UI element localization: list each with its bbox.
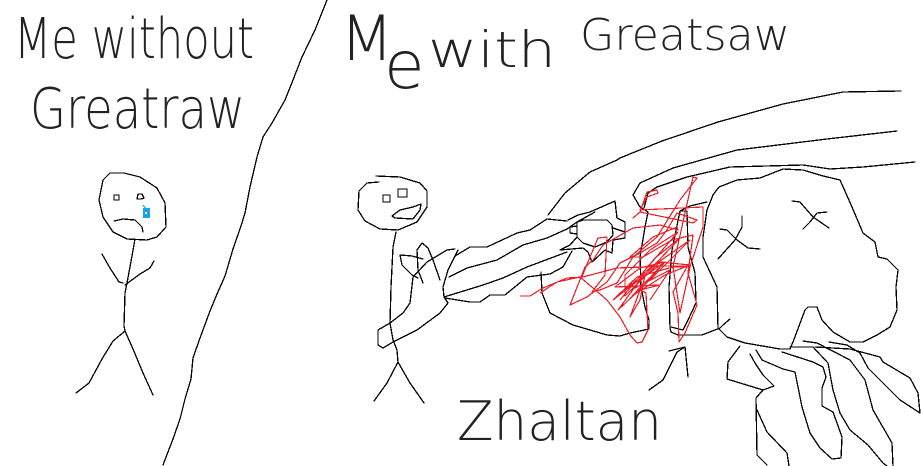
panel divider line: [163, 0, 327, 465]
second back curve and front leg: [541, 131, 897, 336]
saw bottom edge: [445, 251, 572, 302]
saw teeth: [560, 201, 625, 262]
blue tear: [143, 205, 150, 218]
face outline: [358, 176, 427, 230]
left eye X: [718, 216, 760, 259]
tentacle 5: [815, 342, 920, 413]
right eye X: [792, 201, 829, 229]
left eye: [383, 195, 390, 202]
saw rear detail: [570, 226, 577, 234]
saw second line: [449, 212, 595, 277]
tentacle 3: [790, 347, 887, 466]
saw third line: [444, 252, 567, 297]
sad stick figure: [76, 173, 166, 395]
head: [703, 169, 898, 349]
sad face outline: [99, 173, 166, 240]
right eye: [398, 189, 407, 197]
left leg: [76, 331, 125, 393]
jaw tick: [719, 319, 730, 329]
saw cross-bar: [613, 228, 625, 232]
heading: Me with Greatsaw (Me): e: [384, 27, 425, 104]
chainsaw handle: [378, 249, 458, 348]
body: [390, 232, 398, 362]
left leg: [374, 362, 398, 401]
fingers: [417, 243, 440, 283]
rear leg inner: [671, 211, 696, 330]
frown: [114, 219, 143, 232]
hand loop: [400, 255, 423, 278]
tentacle 1 lower: [756, 390, 789, 466]
right leg: [125, 331, 153, 395]
mouth: [392, 204, 421, 219]
heading: Me without Greatraw (line 2): Greatraw: [30, 77, 245, 142]
scribble tail: [520, 266, 690, 296]
left arm: [102, 254, 123, 283]
heading: Me with Greatsaw (Greatsaw): Greatsaw: [580, 10, 790, 61]
right eye: [137, 194, 144, 199]
right arm: [125, 261, 154, 285]
right leg: [398, 362, 424, 403]
happy stick figure: [358, 176, 440, 403]
chainsaw: [378, 201, 625, 348]
main scribble: [540, 177, 703, 343]
saw hub: [577, 220, 613, 247]
heading: Me with Greatsaw (with): with: [428, 21, 556, 79]
saw top edge: [455, 219, 567, 256]
rear leg outer: [669, 202, 720, 335]
tentacle 4: [803, 341, 893, 466]
upper back curve: [548, 91, 901, 215]
third back curve: [644, 162, 915, 208]
red blood scribble: [520, 177, 703, 343]
dense scribble core: [615, 232, 690, 310]
tentacle 1: [727, 346, 774, 390]
heading: Me with Greatsaw (Me): M: [340, 2, 394, 75]
heading: Me without Greatraw (line 1): Me without: [14, 7, 254, 72]
arrow shaft and head: [649, 347, 688, 390]
arrow pointing at Zhaltan: [649, 347, 688, 390]
body and neck: [124, 239, 135, 331]
monster Zhaltan: [541, 91, 920, 466]
label: Zhaltan: Zhaltan: [457, 390, 662, 453]
tentacle 2: [756, 350, 842, 459]
left eye: [114, 195, 119, 200]
